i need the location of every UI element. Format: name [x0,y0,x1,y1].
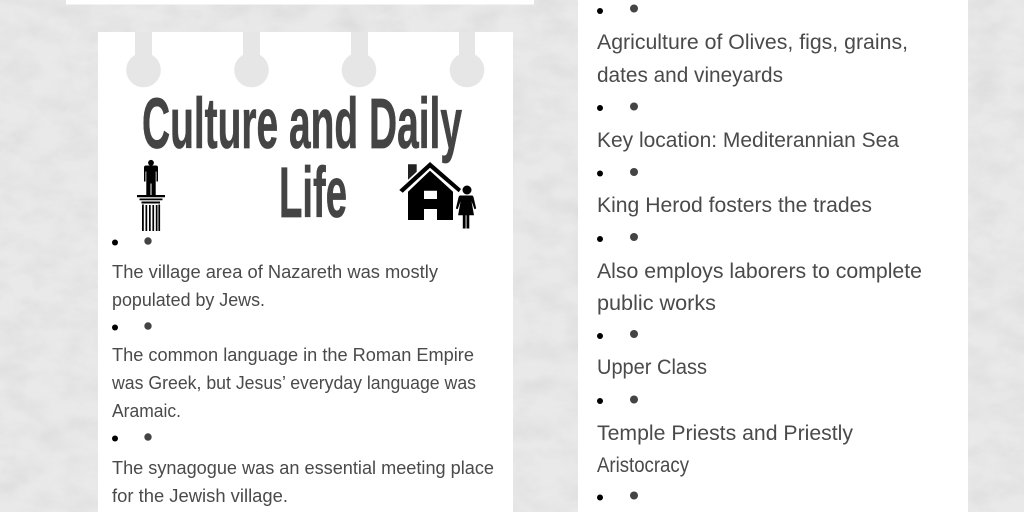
white column [578,0,968,512]
text block: language: The common language in the Roman Empire [112,345,474,365]
text block: synagogue [112,458,494,506]
text block: upper class: Upper Class [597,355,707,379]
text block: temple priests: Aristocracy [597,453,689,477]
text block: synagogue: The synagogue was an essential meeting place [112,458,494,478]
icon: house with woman [399,162,476,228]
text block: key location: Key location: Mediterannian Sea [597,128,899,152]
text block: Nazareth [112,262,438,310]
heading [142,85,462,233]
bullets [597,4,638,500]
text block: laborers: public works [597,291,716,315]
bullets [112,237,152,442]
text block: agriculture [597,30,908,87]
text block: language: Aramaic. [112,401,181,421]
panel: economy and classes [578,0,968,512]
text block: laborers [597,259,922,315]
panel: culture and daily life [98,32,513,512]
text block: language: was Greek, but Jesus’ everyday language was [111,373,476,393]
text block: temple priests: Temple Priests and Priestly [597,421,853,445]
text block: Nazareth: populated by Jews. [112,290,265,310]
text block: synagogue: for the Jewish village. [112,486,288,506]
text block: agriculture: Agriculture of Olives, figs, grains, [597,30,908,54]
icon: man on pedestal [137,160,165,231]
heading: Culture and Daily [142,85,462,164]
heading: Life [279,154,347,233]
text block: temple priests [597,421,853,477]
notepad binding holes [126,32,484,87]
text block: laborers: Also employs laborers to complete [597,259,922,283]
text block: King Herod: King Herod fosters the trades [597,193,872,217]
text block: language [111,345,476,421]
text block: agriculture: dates and vineyards [597,63,783,87]
notepad page [98,32,513,512]
top white strip [66,0,534,4]
text block: Nazareth: The village area of Nazareth was mostly [112,262,438,282]
